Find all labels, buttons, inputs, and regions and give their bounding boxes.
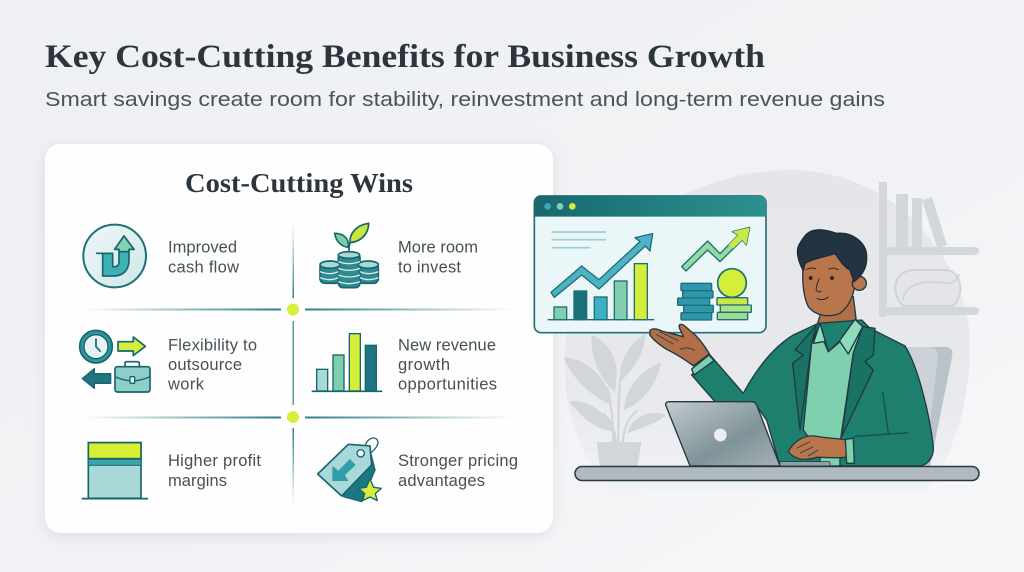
small arrow head highlight <box>728 227 750 248</box>
presenter raised hand over window <box>650 324 709 366</box>
shirt <box>803 320 863 466</box>
text: improved cash flow: cash flow <box>168 258 239 276</box>
background plant <box>563 334 667 467</box>
jacket <box>692 320 933 466</box>
icon: improved cash flow <box>83 225 146 287</box>
text: stronger pricing advantages: Stronger pricing <box>398 452 518 470</box>
text: more room to invest: to invest <box>398 258 461 276</box>
icon: profit margin block <box>82 443 148 499</box>
raised hand <box>650 324 709 366</box>
text: flexibility to outsource work: work <box>167 376 205 394</box>
text: improved cash flow <box>168 238 239 276</box>
card panel <box>45 144 553 533</box>
hair <box>798 230 867 282</box>
icon: price tag with star <box>318 438 381 502</box>
text: new revenue growth opportunities <box>398 336 497 394</box>
text: stronger pricing advantages <box>398 452 518 490</box>
small growth arrow <box>682 227 750 271</box>
right sleeve <box>853 392 908 437</box>
lapels and collar <box>793 325 875 437</box>
icon: bar chart growth <box>312 334 382 391</box>
lime coin stack <box>717 269 751 320</box>
lower hand <box>788 436 847 459</box>
title: Key Cost-Cutting Benefits for Business Growth <box>45 39 765 75</box>
card heading: Cost-Cutting Wins <box>185 168 413 198</box>
text: new revenue growth opportunities: New revenue <box>398 336 496 354</box>
text: stronger pricing advantages: advantages <box>398 472 485 490</box>
window dots <box>544 203 576 210</box>
text: higher profit margins <box>168 452 261 490</box>
text: more room to invest <box>398 238 478 276</box>
face features <box>806 268 839 300</box>
text: more room to invest: More room <box>398 238 478 256</box>
text: improved cash flow: Improved <box>168 238 237 256</box>
finger lines <box>656 332 695 351</box>
lower finger lines <box>797 442 818 456</box>
grid dividers <box>85 224 513 504</box>
ear <box>852 276 866 290</box>
lower cuff <box>845 438 854 463</box>
desk <box>575 466 979 480</box>
teal coin stack <box>678 283 713 320</box>
laptop <box>666 402 830 466</box>
text: higher profit margins: margins <box>168 472 227 490</box>
neck <box>817 297 857 353</box>
main growth arrow <box>551 234 653 297</box>
text: higher profit margins: Higher profit <box>168 452 261 470</box>
icon: clock, arrows and briefcase <box>80 330 150 392</box>
illustration backdrop blob <box>565 170 970 490</box>
text: flexibility to outsource work: outsource <box>168 356 242 374</box>
main bar chart <box>548 264 654 320</box>
background shelf with books and vase <box>879 182 979 317</box>
text lines <box>552 232 606 248</box>
window title bar <box>534 196 766 217</box>
head <box>803 253 855 316</box>
presenter figure <box>650 230 933 466</box>
text: new revenue growth opportunities: growth <box>398 356 450 374</box>
text: flexibility to outsource work <box>167 336 257 394</box>
icon: coins with sprout <box>320 223 378 288</box>
chair <box>895 347 952 466</box>
subtitle: Smart savings create room for stability, reinvestment and long-term revenue gains <box>45 88 885 111</box>
text: new revenue growth opportunities: opportunities <box>398 376 497 394</box>
text: flexibility to outsource work: Flexibility to <box>168 336 257 354</box>
raised cuff <box>692 355 714 375</box>
dashboard window <box>534 196 766 333</box>
